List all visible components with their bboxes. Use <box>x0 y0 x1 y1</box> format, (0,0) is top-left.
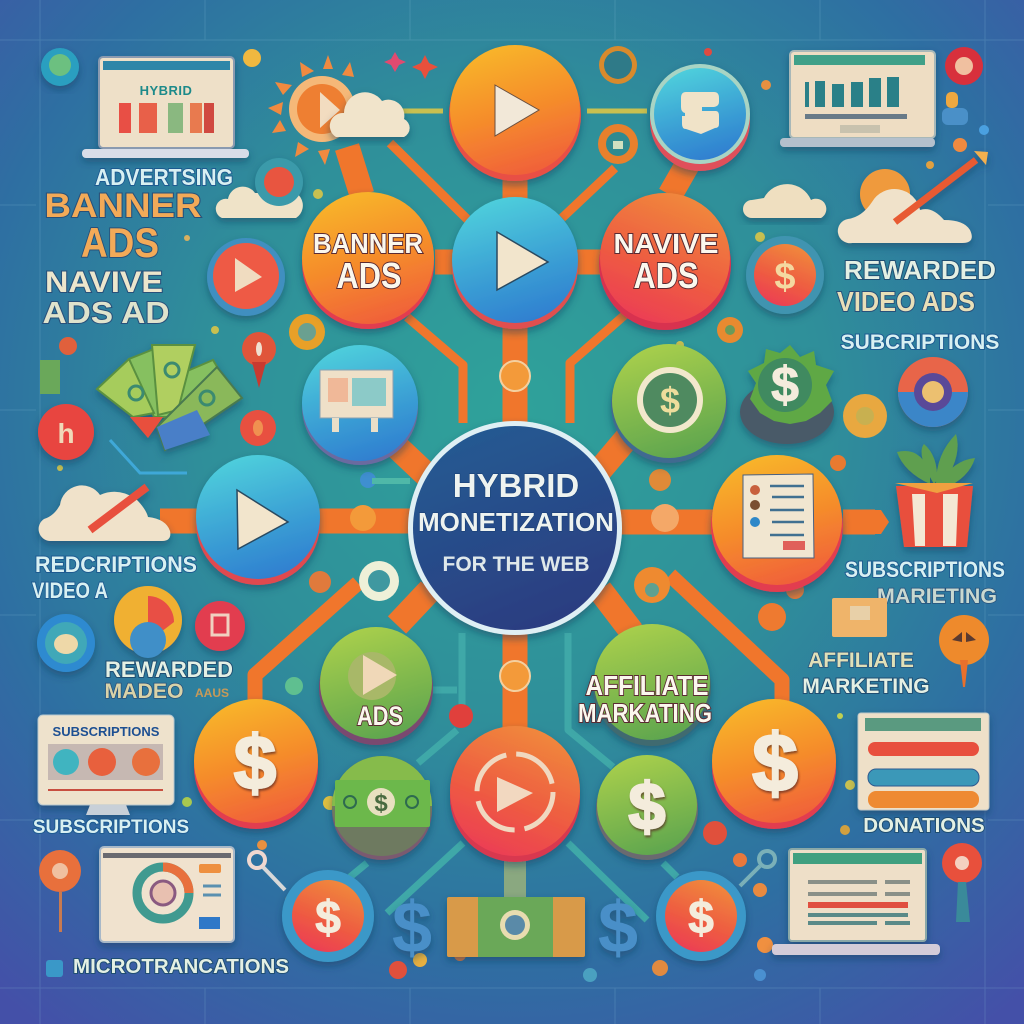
icon: blue jar <box>942 92 968 125</box>
icon: cloud top <box>330 92 410 137</box>
icon: green banknote <box>447 897 585 957</box>
center hub: hybrid monetization: MONETIZATION <box>418 507 614 537</box>
circle: green dollar: $ <box>629 769 665 843</box>
circle: green dollar ring: $ <box>660 380 680 421</box>
label: affiliate marketing: MARKETING <box>802 675 930 698</box>
label: banner ads: BANNER <box>44 187 202 225</box>
label: advertising: ADVERTSING <box>95 164 233 190</box>
icon: cash fan <box>97 345 242 450</box>
label: native ads: ADS AD <box>42 295 170 330</box>
laptop: hybrid chart: HYBRID <box>140 83 192 98</box>
label: donations: DONATIONS <box>863 814 985 837</box>
circle: green dollar ring <box>611 344 727 463</box>
icon: donut chart left <box>114 586 182 658</box>
laptop: table <box>772 849 940 955</box>
circle: banner ads: BANNER <box>313 228 423 259</box>
circle: orange dollar left <box>194 699 318 829</box>
icon: blue square <box>46 960 63 977</box>
circle: red dollar bottom right <box>656 871 746 961</box>
circle: document orange <box>711 455 843 592</box>
icon: orange seedling pin <box>939 615 989 687</box>
connector lines <box>160 111 889 920</box>
laptop: hybrid chart <box>82 57 249 158</box>
circle: green affiliate marketing: MARKATING <box>578 698 712 728</box>
icon: top right blue dollar badge <box>650 64 750 171</box>
label: rewarded / madeo: REWARDED <box>105 657 233 682</box>
circle: banner ads: ADS <box>336 255 402 296</box>
dashboard: donut <box>100 847 234 942</box>
label: subscriptions lower: SUBSCRIPTIONS <box>33 817 189 838</box>
circle: green ads <box>319 627 433 745</box>
circle: red dollar bottom right: $ <box>688 891 714 943</box>
circle: red play bottom <box>450 726 580 862</box>
label: subscriptions marketing right: MARIETING <box>877 585 997 608</box>
circle: banner ads <box>302 192 434 329</box>
icon: top center play button <box>449 45 581 181</box>
label: rewarded / madeo: MADEO <box>104 680 184 703</box>
icon: blue dollar bottom right: $ <box>598 888 638 968</box>
label: microtransactions: MICROTRANCATIONS <box>73 955 289 978</box>
label: subscriptions video ads left: VIDEO A <box>32 578 108 603</box>
circle: red dollar bottom left: $ <box>315 891 341 943</box>
icon: green leafy dollar <box>740 345 834 444</box>
center hub: hybrid monetization: HYBRID <box>453 467 579 504</box>
center hub: hybrid monetization <box>408 421 622 635</box>
circle: orange dollar right: $ <box>752 718 798 809</box>
circle: orange dollar left: $ <box>234 721 276 806</box>
circle: green ads: ADS <box>357 701 403 731</box>
label: native ads: NAVIVE <box>45 266 163 299</box>
icon: key left <box>249 852 285 890</box>
label: subscriptions upper right: SUBCRIPTIONS <box>841 331 999 354</box>
label: subscriptions video ads left <box>32 552 197 603</box>
icon: form panel donations <box>858 713 989 810</box>
circle: monitor <box>302 345 418 465</box>
circle: native ads: NAVIVE <box>614 228 718 259</box>
label: subscriptions marketing right: SUBSCRIPTIONS <box>845 557 1005 582</box>
circle: center play <box>452 197 578 329</box>
icon: red pin bottom right <box>942 843 982 922</box>
circle: green cash <box>332 756 432 860</box>
label: rewarded video ads <box>837 255 996 317</box>
circle: green affiliate marketing: AFFILIATE <box>586 670 708 701</box>
icon: plant in red pot <box>895 434 975 547</box>
label: subscriptions marketing right <box>845 557 1005 608</box>
label: native ads <box>42 266 170 330</box>
icon: red dollar small: $ <box>774 256 796 298</box>
stem rings <box>350 361 679 691</box>
icon: small padlock badge <box>598 124 638 164</box>
icon: blue dollar bottom: $ <box>392 888 432 968</box>
icon: white ring badge <box>359 561 399 601</box>
laptop: bar chart top right <box>780 51 935 147</box>
label: affiliate marketing <box>802 649 930 698</box>
icon: location pin <box>242 332 276 388</box>
circle: green cash: $ <box>374 790 388 817</box>
label: rewarded / madeo: AAUS <box>195 686 229 700</box>
icon: sun with play <box>268 55 355 165</box>
label: rewarded video ads: REWARDED <box>844 255 996 285</box>
monitor: subscriptions <box>38 715 174 815</box>
icon: blue badge <box>37 614 95 672</box>
icon: key right <box>740 851 775 886</box>
circle: green affiliate marketing <box>578 624 712 746</box>
center hub: hybrid monetization: FOR THE WEB <box>442 553 590 576</box>
icon: top-left teal badge <box>41 48 79 86</box>
label: banner ads <box>44 187 202 266</box>
icon: small ad board <box>832 598 887 637</box>
icon: red play small <box>207 238 285 316</box>
icon: red dollar small <box>746 236 824 314</box>
icon: green tag <box>40 360 60 394</box>
icon: top right red badge <box>945 47 983 85</box>
circle: green dollar <box>596 755 698 860</box>
circle: left play <box>196 455 320 585</box>
icon: red h badge <box>38 404 94 460</box>
circle: native ads: ADS <box>634 255 698 296</box>
circle: red dollar bottom left <box>282 870 374 962</box>
icon: cloud with red badge <box>216 158 303 218</box>
label: affiliate marketing: AFFILIATE <box>808 649 914 672</box>
icon: orange pin <box>39 850 81 932</box>
label: rewarded video ads: VIDEO ADS <box>837 286 975 317</box>
label: banner ads: ADS <box>81 219 159 266</box>
monitor: subscriptions: SUBSCRIPTIONS <box>53 724 160 739</box>
icon: red h badge: h <box>57 418 75 449</box>
circle: orange dollar right <box>712 699 836 829</box>
icon: cloud middle right <box>743 184 826 218</box>
icon: red badge <box>195 601 245 651</box>
icon: cloud with red arrow left <box>39 485 170 541</box>
icon: green leafy dollar: $ <box>771 357 799 413</box>
icon: donut badge <box>898 357 968 427</box>
label: rewarded / madeo <box>104 657 233 703</box>
label: subscriptions video ads left: REDCRIPTIONS <box>35 552 197 577</box>
icon: cloud with red arrow <box>838 151 988 243</box>
circle: native ads <box>599 193 731 330</box>
